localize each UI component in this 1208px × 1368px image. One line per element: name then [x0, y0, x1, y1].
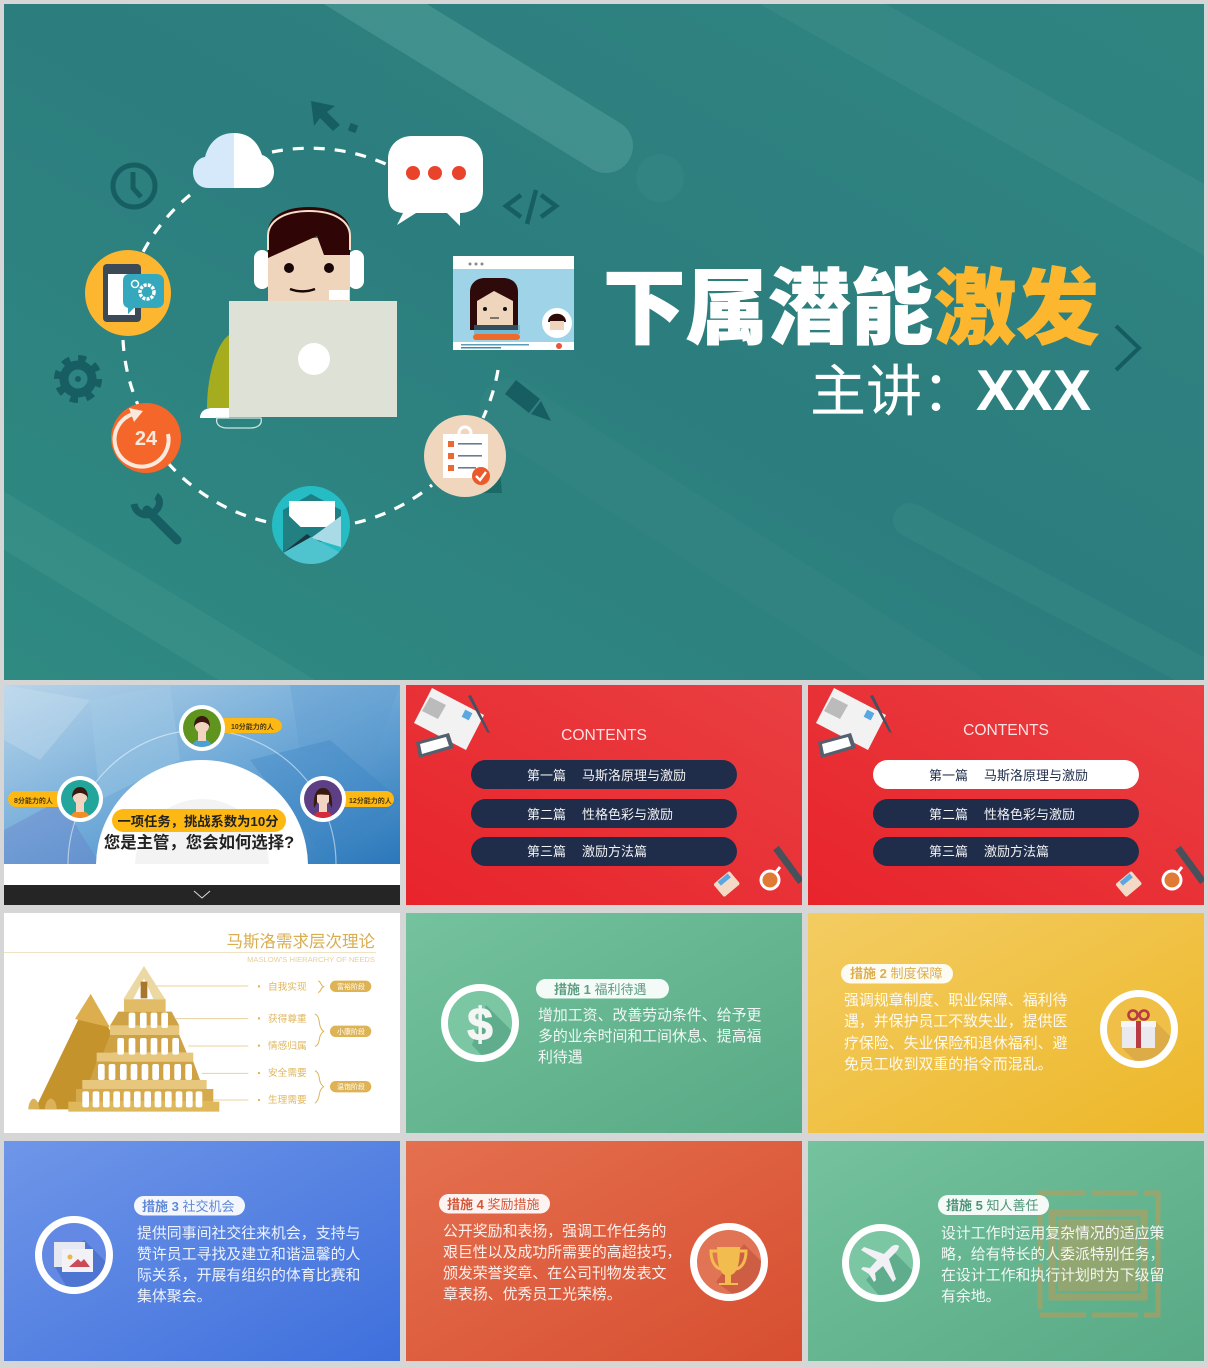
panel: measure 2 system: [808, 913, 1204, 1133]
panel: task challenge slide: [4, 685, 400, 905]
panel: contents slide one: [406, 685, 802, 905]
text: measure 3 body: 际关系，开展有组织的体育比赛和: [137, 1267, 360, 1284]
icon: code tag: [506, 190, 556, 224]
text: measure 4 body: 章表扬、优秀员工光荣榜。: [443, 1285, 622, 1303]
panel: contents slide two: [808, 685, 1204, 905]
menu item three: 激励方法篇: [582, 844, 647, 859]
text: measure 2 body: 强调规章制度、职业保障、福利待: [844, 991, 1067, 1009]
panel: measure 4 reward: [406, 1141, 802, 1361]
menu item three: 激励方法篇: [984, 844, 1049, 859]
tag: measure 2: [841, 964, 953, 984]
menu item two: 第二篇: [527, 807, 566, 822]
tag: measure 4: 措施 4 奖励措施: [447, 1197, 539, 1212]
labels: stage pills: 温饱阶段: [337, 1082, 365, 1091]
menu item three: [873, 837, 1139, 866]
avatar: 10 point person: 10分能力的人: [231, 722, 274, 731]
panel: hero title slide: [0, 0, 1208, 700]
illustration: headset character at laptop: [200, 207, 397, 428]
heading: Maslow title: MASLOW'S HIERARCHY OF NEEDS: [247, 955, 375, 964]
text: measure 4 body: [443, 1223, 681, 1303]
icon: gear: [58, 359, 98, 399]
icon: 24 hour badge: 24: [135, 428, 158, 450]
icon: 24 hour badge: [111, 403, 181, 473]
menu item two: 第二篇: [929, 807, 968, 822]
labels: hierarchy levels: 安全需要: [268, 1066, 307, 1079]
text: measure 3 body: 赞许员工寻找及建立和谐温馨的人: [137, 1246, 360, 1263]
menu item one highlighted: 第一篇: [929, 768, 968, 783]
icon: arrow: [311, 101, 358, 133]
panel: measure 3 social: [4, 1141, 400, 1361]
text: measure 4 body: 颁发荣誉奖章、在公司刊物发表文: [443, 1264, 666, 1282]
avatar: 8 point person: [8, 776, 103, 822]
text: measure 3 body: 集体聚会。: [137, 1288, 211, 1305]
text: measure 3 body: [137, 1224, 360, 1305]
labels: stage pills: 小康阶段: [337, 1027, 365, 1036]
title: 下属潜能: [603, 263, 933, 355]
title: [603, 263, 1099, 355]
callout: task statement: [104, 809, 294, 852]
icon: phone settings badge: [85, 250, 171, 336]
heading: Maslow title: 马斯洛需求层次理论: [226, 932, 376, 951]
menu item one: 马斯洛原理与激励: [582, 768, 686, 783]
icon: envelope badge: [272, 486, 350, 569]
text: measure 1 body: [538, 1007, 761, 1066]
icon: dollar badge: [441, 984, 519, 1062]
labels: hierarchy levels: 生理需要: [268, 1093, 307, 1106]
chart: pyramid: [28, 966, 371, 1112]
text: measure 5 body: 有余地。: [941, 1287, 1001, 1305]
text: measure 5 body: 设计工作时运用复杂情况的适应策: [941, 1224, 1164, 1242]
avatar: 12 point person: [300, 776, 394, 822]
arrow: next chevron: [1116, 326, 1139, 370]
tag: measure 5: 措施 5 知人善任: [946, 1198, 1038, 1213]
menu item one: [471, 760, 737, 789]
subtitle: presenter: [810, 359, 1091, 423]
heading: contents: CONTENTS: [963, 722, 1049, 739]
text: measure 2 body: 疗保险、失业保险和退休福利、避: [844, 1035, 1067, 1052]
labels: hierarchy levels: 自我实现: [268, 980, 307, 993]
text: measure 2 body: 遇，并保护员工不致失业，提供医: [844, 1013, 1067, 1030]
icon: clipboard badge: [424, 415, 506, 497]
labels: stage pills: 富裕阶段: [337, 982, 365, 991]
menu item three: 第三篇: [527, 844, 566, 859]
text: measure 4 body: 公开奖励和表扬，强调工作任务的: [443, 1223, 666, 1240]
avatar: 12 point person: 12分能力的人: [349, 796, 392, 805]
menu item three: [471, 837, 737, 866]
text: measure 2 body: 免员工收到双重的指令而混乱。: [844, 1056, 1052, 1073]
icon: calculator, coffee, ruler: [713, 848, 801, 897]
panel: measure 1 welfare: [406, 913, 802, 1133]
labels: hierarchy levels: 获得尊重: [268, 1012, 307, 1025]
menu item one highlighted: 马斯洛原理与激励: [984, 768, 1088, 783]
text: measure 1 body: 利待遇: [538, 1049, 583, 1066]
dashed orbit ring: [123, 148, 498, 523]
tag: measure 1: [536, 979, 669, 998]
subtitle: presenter: XXX: [976, 359, 1091, 423]
icon: video call window: [453, 256, 574, 350]
icon: pictures badge: [38, 1220, 114, 1300]
icon: cloud: [193, 133, 274, 188]
icon: speech bubble: [388, 136, 483, 226]
menu item three: 第三篇: [929, 844, 968, 859]
panel: Maslow hierarchy slide: [4, 913, 400, 1133]
icon: documents and phone: [414, 688, 490, 758]
tag: measure 3: 措施 3 社交机会: [142, 1199, 234, 1214]
icon: clock: [113, 165, 155, 207]
avatar: 10 point person: [179, 705, 282, 751]
icon: airplane badge: [846, 1228, 916, 1304]
arrow: down chevron: [194, 891, 210, 898]
menu item one: 第一篇: [527, 768, 566, 783]
avatar: 8 point person: 8分能力的人: [14, 796, 53, 805]
watermark: stamp: [1040, 1193, 1158, 1315]
text: measure 4 body: 艰巨性以及成功所需要的高超技巧，: [443, 1244, 681, 1261]
text: measure 1 body: 增加工资、改善劳动条件、给予更: [538, 1007, 761, 1024]
menu item two: [873, 799, 1139, 828]
icon: trophy badge: [694, 1226, 768, 1298]
menu item two: [471, 799, 737, 828]
text: measure 1 body: 多的业余时间和工间休息、提高福: [538, 1027, 761, 1045]
menu item two: 性格色彩与激励: [582, 807, 673, 822]
callout: task statement: 一项任务，挑战系数为10分: [117, 813, 279, 829]
title: 激发: [934, 263, 1099, 355]
labels: hierarchy levels: 情感归属: [268, 1039, 307, 1052]
menu item one highlighted: [873, 760, 1139, 789]
text: measure 2 body: [844, 991, 1067, 1073]
tag: measure 4: [439, 1194, 550, 1214]
subtitle: presenter: 主讲：: [810, 360, 978, 423]
labels: hierarchy levels: [268, 980, 307, 1106]
icon: calculator, coffee, ruler: [1115, 848, 1203, 897]
panel: measure 5 talent: [808, 1141, 1204, 1361]
tag: measure 5: [938, 1195, 1049, 1215]
heading: contents: CONTENTS: [561, 727, 647, 744]
tag: measure 2: 措施 2 制度保障: [850, 966, 942, 981]
icon: gift badge: [1104, 994, 1180, 1076]
text: measure 5 body: 略，给有特长的人委派特别任务，: [941, 1246, 1164, 1263]
labels: stage pills: [337, 982, 365, 1091]
menu item two: 性格色彩与激励: [984, 807, 1075, 822]
text: measure 5 body: 在设计工作和执行计划时为下级留: [941, 1267, 1164, 1284]
tag: measure 3: [134, 1196, 245, 1216]
icon: pencil: [505, 380, 551, 421]
icon: dollar badge: $: [467, 998, 493, 1050]
icon: wrench: [134, 496, 177, 540]
heading: Maslow title: [4, 932, 376, 964]
text: measure 5 body: [941, 1224, 1164, 1305]
icon: documents and phone: [816, 688, 892, 758]
callout: task statement: 您是主管，您会如何选择?: [104, 833, 294, 852]
text: measure 3 body: 提供同事间社交往来机会，支持与: [137, 1224, 360, 1242]
tag: measure 1: 措施 1 福利待遇: [554, 982, 646, 997]
